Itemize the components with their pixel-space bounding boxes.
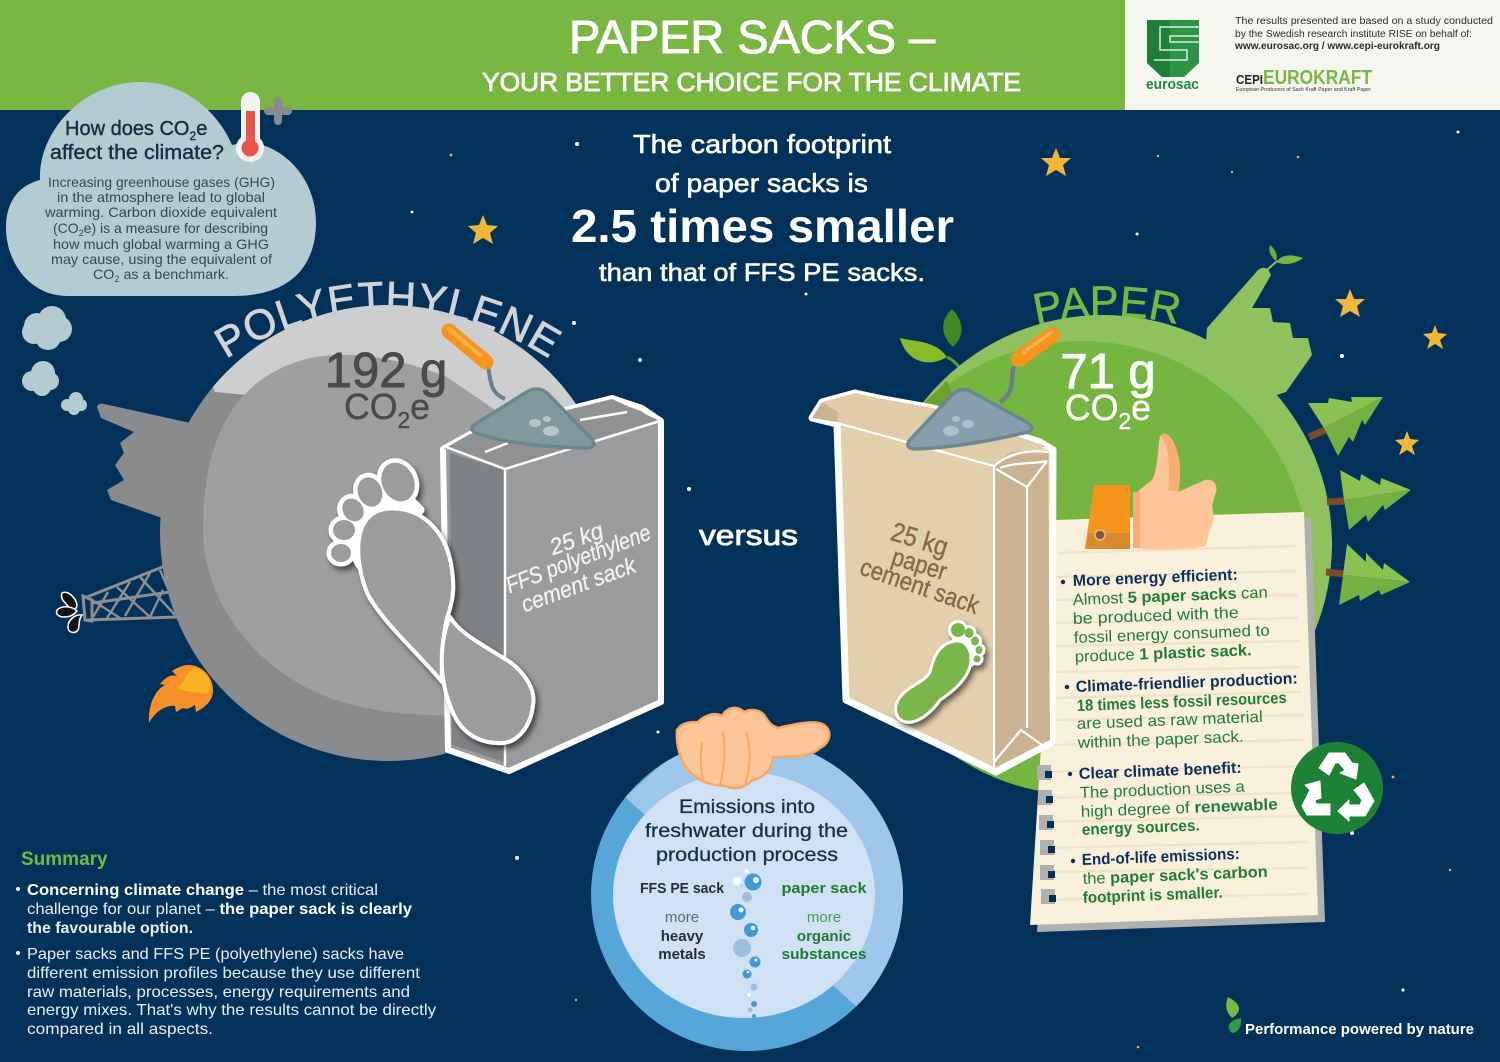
oil drops (57, 592, 82, 632)
central headline: 2.5 times smaller (571, 200, 954, 252)
cloud body text: warming. Carbon dioxide equivalent (44, 204, 277, 220)
summary point 2 (16, 946, 436, 1038)
globe heading (645, 797, 848, 866)
summary point 2: different emission profiles because they use different (27, 965, 421, 982)
sack label: paper (888, 543, 950, 586)
logo: CEPI Eurokraft: European Producers of Sack Kraft Paper and Kraft Paper (1236, 87, 1371, 93)
cloud body text: how much global warming a GHG (53, 236, 269, 252)
column: FFS PE sack: FFS PE sack (640, 880, 725, 897)
cloud body text: CO (93, 266, 114, 282)
central headline (571, 129, 954, 287)
icon: recycling badge (1291, 742, 1383, 834)
summary point 1: challenge for our planet – the paper sack is clearly (27, 901, 412, 918)
sack label: FFS polyethylene (502, 519, 654, 598)
factory leaves (1267, 245, 1303, 270)
benefit: more energy efficient: fossil energy consumed to (1074, 622, 1270, 647)
benefit: end-of-life emissions: End-of-life emissions: (1082, 846, 1240, 869)
summary heading: Summary (21, 849, 108, 870)
column: FFS PE sack: metals (658, 946, 706, 963)
polyethylene sack (443, 398, 661, 771)
cloud heading (50, 118, 224, 164)
cloud heading: How does CO (65, 118, 190, 140)
column: paper sack: more (807, 909, 841, 926)
benefit: climate-friendlier production: are used as raw material (1077, 709, 1263, 733)
benefit: end-of-life emissions: footprint is smaller. (1083, 885, 1223, 907)
cloud body text (44, 174, 277, 284)
cloud heading: affect the climate? (50, 142, 224, 164)
summary point 1: the favourable option. (27, 920, 193, 937)
value: 71 g CO2e: CO (1065, 387, 1119, 428)
cloud heading: 2 (190, 129, 196, 143)
value: 192 g CO2e: 192 g (325, 344, 447, 398)
gray footprint (331, 457, 533, 743)
icon: flame (149, 665, 213, 723)
icon: thermometer (236, 92, 264, 162)
column: FFS PE sack: more (665, 909, 699, 926)
smoke clouds (22, 306, 87, 415)
summary point 2: energy mixes. That's why the results cannot be directly (27, 1002, 436, 1019)
column: FFS PE sack: heavy (661, 928, 704, 945)
tree 3 (1326, 544, 1410, 605)
paper factory silhouette (1200, 268, 1312, 420)
summary point 2: Paper sacks and FFS PE (polyethylene) sacks have (27, 946, 404, 963)
benefit: climate-friendlier production (1065, 670, 1298, 752)
value: 71 g CO2e: 2 (1118, 408, 1131, 434)
benefit: more energy efficient: Almost 5 paper sacks can (1073, 585, 1268, 609)
benefit: more energy efficient (1061, 567, 1270, 666)
column: paper sack (782, 880, 867, 963)
value: 192 g CO2e: CO (344, 386, 398, 427)
cloud body text: 2 (79, 228, 84, 238)
summary point 1: Concerning climate change – the most critical (27, 882, 378, 899)
benefit: clear climate benefit: high degree of renewable (1081, 796, 1278, 821)
water bubbles (730, 869, 762, 1018)
sack label: 25 kg (888, 517, 952, 562)
benefit: clear climate benefit: The production uses a (1080, 779, 1245, 802)
column: paper sack: substances (782, 946, 866, 963)
benefit: clear climate benefit: energy sources. (1082, 817, 1200, 839)
night sky stars (411, 130, 1460, 1048)
sack label (856, 517, 983, 620)
logo: CEPI Eurokraft: CEPI (1236, 72, 1263, 87)
value: 192 g CO2e: e (410, 386, 430, 427)
tagline with leaf: Performance powered by nature (1245, 1021, 1474, 1038)
summary point 2: raw materials, processes, energy requirements and (27, 984, 410, 1001)
value: 192 g CO2e (325, 344, 447, 433)
globe heading: production process (656, 845, 838, 866)
column: paper sack: paper sack (782, 880, 867, 897)
central headline: of paper sacks is (655, 168, 868, 198)
study credit text: The results presented are based on a study conducted (1235, 16, 1493, 27)
study credit text: www.eurosac.org / www.cepi-eurokraft.org (1234, 41, 1440, 52)
globe heading: Emissions into (679, 797, 815, 818)
tagline with leaf (1226, 997, 1474, 1038)
benefit: end-of-life emissions (1071, 846, 1268, 907)
logo: CEPI Eurokraft: EUROKRAFT (1263, 67, 1372, 89)
label: paper: PAPER (1034, 286, 1180, 324)
tree 1 (1308, 397, 1383, 456)
benefit: climate-friendlier production: 18 times less fossil resources (1077, 690, 1287, 715)
cloud heading: e (196, 118, 207, 140)
panel: freshwater emissions globe (591, 730, 910, 1051)
notepaper panel (1030, 512, 1325, 932)
study credit text (1234, 16, 1493, 52)
cloud body text: as a benchmark. (120, 266, 229, 282)
icon: thumb sideways (677, 708, 829, 788)
logo: eurosac (1146, 20, 1199, 93)
value: 71 g CO2e: 71 g (1060, 345, 1156, 399)
summary block (16, 849, 436, 1038)
study credit text: by the Swedish research institute RISE on behalf of: (1235, 29, 1472, 40)
leaf sprout on paper planet (900, 309, 962, 368)
benefit: clear climate benefit (1068, 760, 1278, 839)
sack label (502, 517, 654, 617)
icon: plus sign (268, 101, 288, 121)
cloud body text: in the atmosphere lead to global (57, 189, 265, 205)
value: 71 g CO2e (1060, 345, 1156, 434)
logo: CEPI Eurokraft (1236, 67, 1372, 93)
sack label: 25 kg (545, 517, 607, 560)
polyethylene factory silhouette (97, 404, 195, 530)
column: paper sack: organic (797, 928, 851, 945)
main title: PAPER SACKS – (569, 11, 935, 63)
tree 2 (1327, 470, 1411, 530)
versus label: versus (699, 520, 798, 552)
trowel on polyethylene sack (449, 329, 594, 448)
trowel on paper sack (908, 332, 1052, 449)
central headline: than that of FFS PE sacks. (599, 259, 925, 287)
benefit: more energy efficient: be produced with the (1073, 605, 1239, 628)
globe heading: freshwater during the (645, 821, 848, 842)
cloud body text: Increasing greenhouse gases (GHG) (48, 174, 275, 190)
central headline: The carbon footprint (633, 129, 892, 159)
label: polyethylene: POLYETHYLENE (214, 282, 562, 358)
cloud body text: may cause, using the equivalent of (51, 251, 272, 267)
sack label: cement sack (517, 551, 640, 617)
value: 71 g CO2e: e (1131, 387, 1151, 428)
green footprint (896, 623, 982, 722)
benefit: more energy efficient: produce 1 plastic sack. (1075, 642, 1252, 666)
summary point 1 (16, 882, 412, 937)
binding holes (1037, 765, 1056, 904)
benefit: clear climate benefit: Clear climate benefit: (1079, 760, 1242, 783)
sack label: cement sack (856, 553, 983, 620)
column: FFS PE sack (640, 880, 725, 963)
header banner (0, 0, 1500, 110)
benefit: more energy efficient: More energy efficient: (1073, 567, 1238, 590)
summary point 2: compared in all aspects. (27, 1021, 213, 1038)
cloud body text: 2 (114, 274, 120, 284)
benefit: end-of-life emissions: the paper sack's carbon (1083, 864, 1268, 888)
icon: thumbs up (1085, 434, 1217, 549)
cloud: how does CO2e affect the climate (6, 82, 316, 296)
polyethylene planet (160, 305, 576, 761)
value: 192 g CO2e: 2 (397, 407, 410, 433)
benefit: climate-friendlier production: within the paper sack. (1076, 729, 1244, 752)
benefit: climate-friendlier production: Climate-friendlier production: (1076, 670, 1298, 696)
paper sack (812, 393, 1053, 772)
cloud body text: (CO (53, 220, 79, 236)
subtitle: YOUR BETTER CHOICE FOR THE CLIMATE (482, 67, 1021, 97)
oil rig (83, 566, 178, 621)
logo: eurosac: eurosac (1146, 76, 1199, 93)
paper planet (855, 315, 1332, 795)
cloud body text: e) is a measure for describing (84, 220, 268, 236)
